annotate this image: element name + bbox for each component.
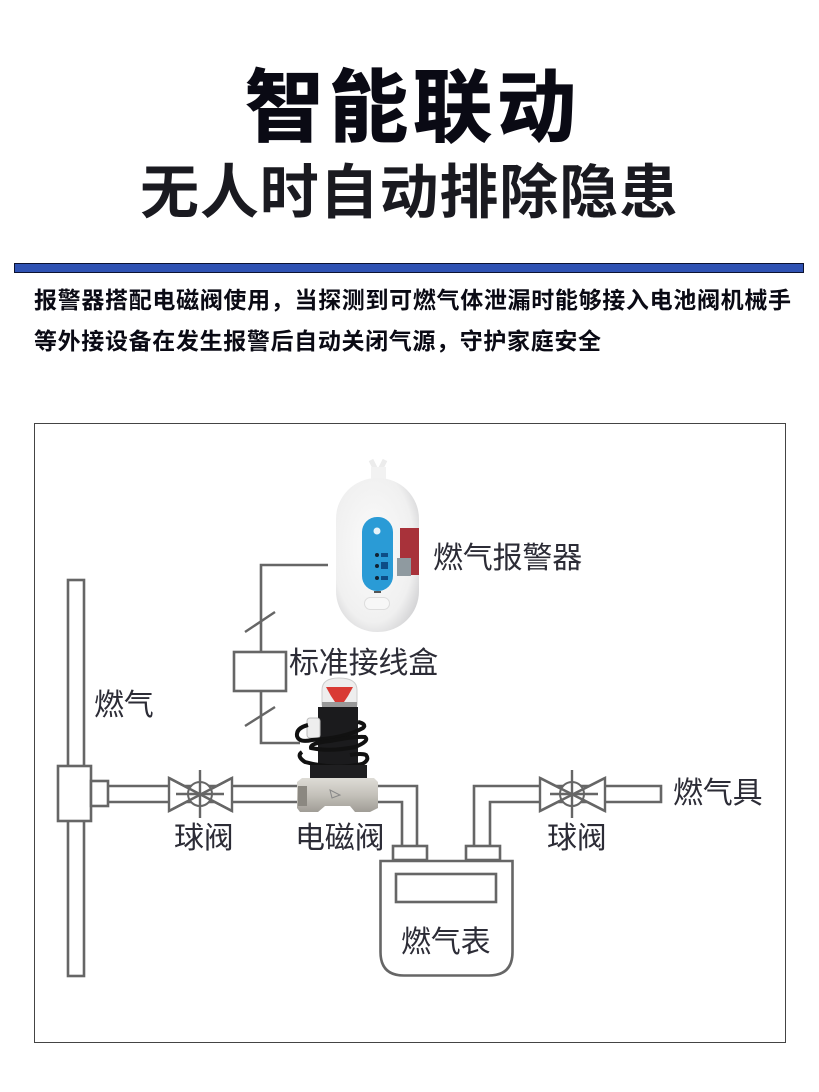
description text bbox=[34, 287, 791, 354]
icon: gas supply pipe bbox=[58, 580, 108, 976]
pipe: supply to solenoid valve bbox=[108, 786, 298, 802]
label: ball valve right: 球阀 bbox=[547, 822, 607, 855]
icon: ball valve left bbox=[169, 770, 232, 818]
title: 智能联动 bbox=[245, 63, 576, 152]
wiring: alarm to junction box to valve bbox=[245, 565, 328, 743]
label: ball valve left: 球阀 bbox=[174, 822, 234, 855]
pipe: solenoid to meter bbox=[376, 786, 417, 846]
pipe: meter to appliance bbox=[474, 786, 661, 846]
label: gas: 燃气 bbox=[94, 689, 154, 722]
label: junction box: 标准接线盒 bbox=[289, 647, 438, 680]
description text: 等外接设备在发生报警后自动关闭气源，守护家庭安全 bbox=[34, 328, 601, 354]
icon: gas meter bbox=[380, 846, 512, 976]
blue divider bar bbox=[14, 264, 804, 272]
description text: 报警器搭配电磁阀使用，当探测到可燃气体泄漏时能够接入电池阀机械手 bbox=[34, 287, 791, 313]
subtitle: 无人时自动排除隐患 bbox=[140, 160, 678, 226]
junction box bbox=[234, 652, 286, 691]
label: gas alarm: 燃气报警器 bbox=[433, 542, 582, 575]
label: gas meter: 燃气表 bbox=[401, 926, 490, 959]
diagram panel frame bbox=[34, 424, 786, 1042]
icon: gas alarm device bbox=[336, 460, 419, 632]
icon: ball valve right bbox=[540, 770, 605, 818]
label: gas appliance: 燃气具 bbox=[673, 777, 762, 810]
label: solenoid valve: 电磁阀 bbox=[295, 822, 384, 855]
icon: solenoid valve bbox=[297, 678, 378, 812]
